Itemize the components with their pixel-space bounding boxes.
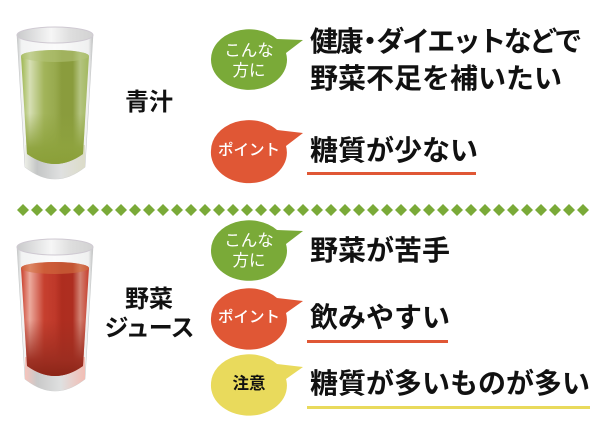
- text: target users of aojiru, line 1: 健康・ダイエットなどで: [310, 26, 580, 57]
- bubble label: who it suits, section 2: [224, 232, 274, 270]
- text: vegetable juice caution: 糖質が多いものが多い: [310, 368, 590, 399]
- text: target users of vegetable juice: 野菜が苦手: [310, 235, 450, 266]
- icon: glass of red vegetable juice: [17, 239, 93, 391]
- bubble label: point, section 1: ポイント: [218, 142, 280, 159]
- icon: glass of green juice: [17, 27, 93, 179]
- speech bubble: yellow caution: [211, 354, 303, 416]
- text: aojiru point: 糖質が少ない: [310, 135, 478, 166]
- underline: vegetable juice caution: [307, 406, 590, 409]
- underline: aojiru point: [307, 172, 476, 175]
- text: vegetable juice point: 飲みやすい: [310, 302, 450, 333]
- label: aojiru: 青汁: [125, 89, 173, 116]
- bubble label: who it suits, section 1: 方に: [232, 62, 266, 80]
- bubble label: caution: 注意: [232, 375, 266, 393]
- text: target users of aojiru, line 2: 野菜不足を補いたい: [310, 63, 562, 94]
- underline: vegetable juice point: [307, 340, 448, 343]
- speech bubble: red, section 2: [211, 288, 303, 350]
- bubble label: who it suits, section 1: こんな: [224, 42, 274, 60]
- label: vegetable juice: 野菜: [125, 286, 173, 313]
- diamond divider: [17, 204, 589, 216]
- label: vegetable juice: [104, 286, 194, 342]
- bubble label: who it suits, section 1: [224, 42, 274, 80]
- label: vegetable juice: ジュース: [104, 315, 194, 342]
- bubble label: point, section 2: ポイント: [218, 309, 280, 326]
- speech bubble: green, section 2: [211, 220, 303, 281]
- bubble label: who it suits, section 2: こんな: [224, 232, 274, 250]
- speech bubble: red, section 1: [211, 120, 303, 183]
- bubble label: who it suits, section 2: 方に: [232, 252, 266, 270]
- speech bubble: green, section 1: [211, 29, 303, 90]
